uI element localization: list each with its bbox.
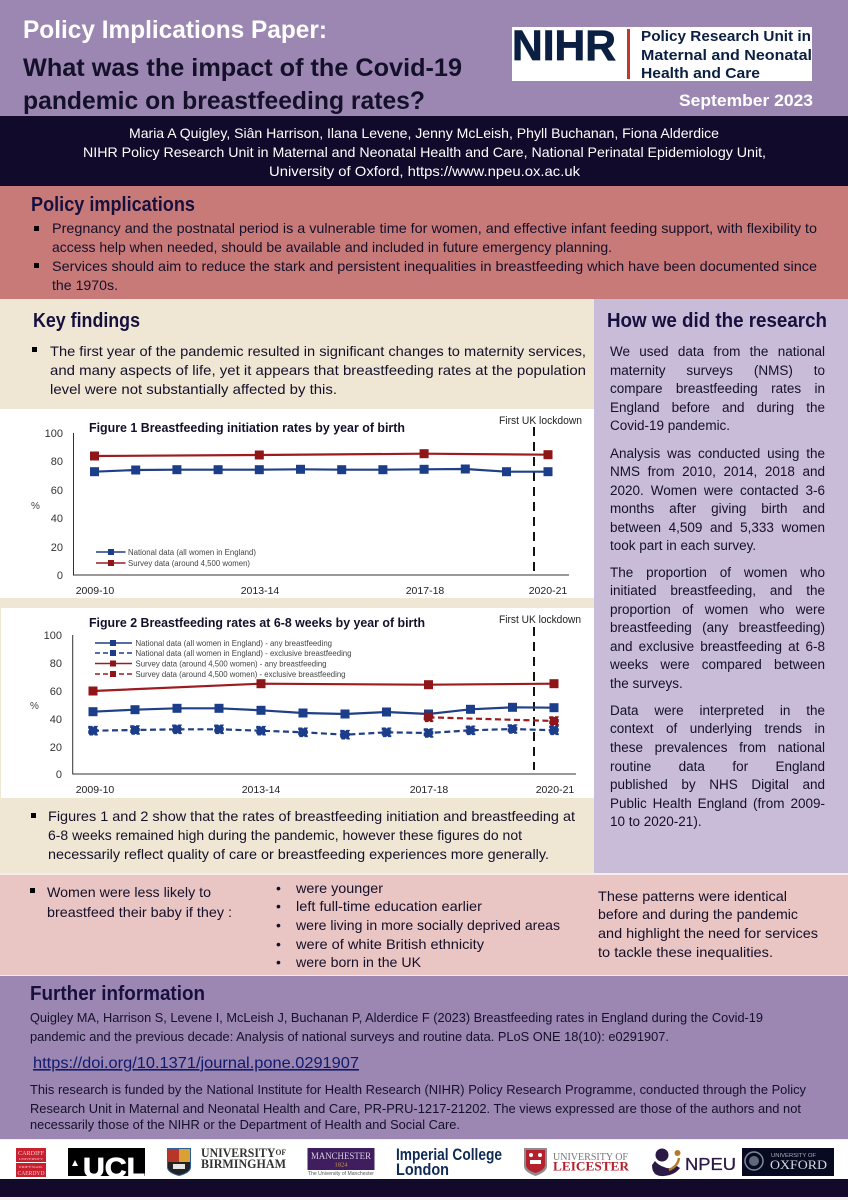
heading: Key findings (33, 310, 140, 332)
logo: Leicester (524, 1148, 630, 1176)
logo: Oxford (742, 1148, 834, 1176)
factor list: were younger (295, 880, 383, 896)
method paragraphs: the surveys. (610, 676, 683, 691)
factor list: left full-time education earlier (296, 898, 482, 914)
conclusion: before and during the pandemic (598, 906, 798, 922)
chart: figure 1: 2009-10 (76, 585, 114, 597)
factor list: • (276, 898, 281, 914)
chart: figure 1: 2013-14 (241, 585, 279, 597)
method paragraphs: took part in each survey. (610, 538, 756, 553)
citation (30, 1010, 763, 1044)
NIHR logo (512, 22, 812, 82)
chart: figure 2: % (30, 701, 39, 712)
authors band: NIHR Policy Research Unit in Maternal and Neonatal Health and Care, National Perinatal Epidemiology Unit, (83, 144, 766, 160)
citation: pandemic and the previous decade: Analysis of national surveys and routine data. PLoS ONE 18(10): e0291907. (30, 1029, 669, 1044)
method paragraphs: these prevalences from national (610, 740, 825, 755)
chart: figure 2 (1, 608, 594, 798)
logo: Leicester: LEICESTER (553, 1158, 630, 1174)
method paragraphs (610, 344, 825, 829)
findings text (32, 343, 586, 397)
panel: how we did the research (594, 299, 848, 873)
NIHR logo: Maternal and Neonatal (641, 47, 812, 64)
method paragraphs: Public Health England (from 2009- (610, 796, 825, 811)
method paragraphs: initiated breastfeeding, and the (610, 583, 825, 598)
figures commentary: necessarily reflect quality of care or breastfeeding experiences more generally. (48, 846, 549, 862)
logo: Cardiff: CARDIFF (18, 1150, 44, 1157)
chart: figure 2: 2017-18 (410, 784, 448, 796)
logo: Birmingham: UNIVERSITY (201, 1146, 280, 1160)
logo: Manchester: The University of Manchester (308, 1171, 374, 1177)
logo: Manchester: MANCHESTER (311, 1151, 371, 1161)
inequalities lead-in: breastfeed their baby if they : (47, 904, 232, 920)
funding statement: Research Unit in Maternal and Neonatal Health and Care, PR-PRU-1217-21202. The views expressed are those of the authors and not (30, 1101, 801, 1116)
policy bullets: access help when needed, should be available and included in future emergency planning. (52, 239, 612, 255)
method paragraphs: England before and during the (610, 400, 825, 415)
logo: Imperial College London: Imperial College (396, 1146, 502, 1164)
footer band (0, 1179, 848, 1197)
method paragraphs: breastfeeding (any breastfeeding) (610, 620, 825, 635)
factor list: were living in more socially deprived areas (295, 917, 560, 933)
figures commentary (31, 808, 575, 862)
method paragraphs: routine data for England (610, 759, 825, 774)
factor list: • (276, 936, 281, 952)
factor list: were born in the UK (295, 954, 422, 970)
funding statement (30, 1082, 806, 1132)
chart: figure 2: 80 (50, 658, 62, 670)
factor list (276, 880, 560, 970)
chart: figure 2: National data (all women in England) - exclusive breastfeeding (136, 649, 352, 658)
logo strip (0, 1140, 848, 1179)
method paragraphs: The proportion of women who (610, 565, 825, 580)
logo: Cardiff: PRIFYSGOL (19, 1165, 43, 1169)
chart: figure 1: 60 (51, 485, 63, 497)
citation: Quigley MA, Harrison S, Levene I, McLeish J, Buchanan P, Alderdice F (2023) Breastfeeding rates in England during the Covid-19 (30, 1010, 763, 1025)
chart: figure 1: % (31, 501, 40, 512)
chart: figure 2: First UK lockdown (499, 614, 581, 626)
method paragraphs: months after giving birth and (610, 501, 825, 516)
chart: figure 1: 0 (57, 570, 63, 582)
method paragraphs: and exclusive breastfeeding at 6-8 (610, 639, 825, 654)
method paragraphs: weeks were compared between (610, 657, 825, 672)
chart: figure 1: Survey data (around 4,500 women) (128, 559, 250, 568)
title (23, 16, 462, 115)
funding statement: necessarily those of the NIHR or the Department of Health and Social Care. (30, 1117, 460, 1132)
funding statement: This research is funded by the National Institute for Health Research (NIHR) Policy Research Programme, conducted through the Policy (30, 1082, 806, 1097)
chart: figure 2: 2013-14 (242, 784, 280, 796)
chart: figure 1: 100 (45, 428, 63, 440)
title: pandemic on breastfeeding rates? (23, 87, 425, 115)
chart: figure 1: 20 (51, 542, 63, 554)
method paragraphs: 2020. Women were contacted 3-6 (610, 483, 825, 498)
date: September 2023 (679, 91, 813, 110)
factor list: • (276, 954, 281, 970)
logo: Manchester (308, 1148, 374, 1177)
chart: figure 1: First UK lockdown (499, 415, 582, 427)
logo: Birmingham: OF (275, 1148, 286, 1157)
logo: Oxford: OXFORD (770, 1157, 827, 1172)
chart: figure 2: 40 (50, 714, 62, 726)
method paragraphs: NMS from 2010, 2014, 2018 and (610, 464, 825, 479)
chart: figure 1: 2020-21 (529, 585, 567, 597)
figures commentary: Figures 1 and 2 show that the rates of breastfeeding initiation and breastfeeding at (48, 808, 575, 824)
policy bullets (34, 220, 817, 293)
logo: Oxford: UNIVERSITY OF (771, 1153, 817, 1159)
logo: Leicester: UNIVERSITY OF (553, 1152, 628, 1163)
method paragraphs: context of underlying trends in (610, 721, 825, 736)
logo: Imperial College London: London (396, 1161, 449, 1179)
heading: Policy implications (31, 194, 195, 216)
link: https://doi.org/10.1371/journal.pone.0291907 (33, 1055, 359, 1072)
method paragraphs: proportion of women who were (610, 602, 825, 617)
method paragraphs: Covid-19 pandemic. (610, 418, 730, 433)
policy bullets: Pregnancy and the postnatal period is a vulnerable time for women, and effective infant feeding support, with flexibility to (52, 220, 817, 236)
factor list: • (276, 880, 281, 896)
heading: Further information (30, 983, 205, 1005)
chart: figure 2: 60 (50, 686, 62, 698)
chart: figure 2: 20 (50, 742, 62, 754)
conclusion: to tackle these inequalities. (598, 944, 773, 960)
authors band (0, 116, 848, 186)
authors band: Maria A Quigley, Siân Harrison, Ilana Levene, Jenny McLeish, Phyll Buchanan, Fiona Alderdice (129, 125, 719, 141)
method paragraphs: Analysis was conducted using the (610, 446, 825, 461)
logo: Imperial College London (396, 1146, 502, 1179)
logo: Birmingham (167, 1146, 286, 1176)
conclusion: and highlight the need for services (598, 925, 818, 941)
method paragraphs: We used data from the national (610, 344, 825, 359)
logo: Cardiff: CAERDYD (18, 1170, 45, 1177)
policy bullets: Services should aim to reduce the stark and persistent inequalities in breastfeeding which have been documented since (52, 258, 817, 274)
logo: Manchester: 1824 (334, 1162, 348, 1168)
chart: figure 2: National data (all women in England) - any breastfeeding (136, 639, 332, 648)
heading: How we did the research (607, 310, 827, 332)
chart: figure 2: 0 (56, 769, 62, 781)
chart: figure 1: Figure 1 Breastfeeding initiation rates by year of birth (89, 420, 405, 435)
logo: UCL (68, 1148, 145, 1183)
logo: Birmingham: BIRMINGHAM (201, 1157, 286, 1171)
findings text: level were not substantially affected by this. (50, 381, 337, 397)
policy bullets: the 1970s. (52, 277, 118, 293)
logo: NPEU (652, 1148, 736, 1176)
logo: Cardiff (16, 1148, 46, 1177)
chart: figure 2: 100 (44, 630, 62, 642)
findings text: and many aspects of life, yet it appears that breastfeeding rates at the population (50, 362, 586, 378)
title: What was the impact of the Covid-19 (23, 54, 462, 82)
NIHR logo: Policy Research Unit in (641, 28, 811, 45)
panel: key findings (0, 299, 594, 873)
chart: figure 1: 80 (51, 456, 63, 468)
factor list: • (276, 917, 281, 933)
chart: figure 2: Survey data (around 4,500 women) - exclusive breastfeeding (136, 670, 346, 679)
method paragraphs: published by NHS Digital and (610, 777, 825, 792)
header panel (0, 0, 848, 116)
figures commentary: 6-8 weeks remained high during the pandemic, however these figures do not (48, 827, 522, 843)
chart: figure 2: 2020-21 (536, 784, 574, 796)
panel: inequalities (0, 875, 848, 975)
NIHR logo: Health and Care (641, 65, 760, 82)
method paragraphs: maternity surveys (NMS) to (610, 363, 825, 378)
conclusion: These patterns were identical (598, 888, 787, 904)
logo: Cardiff: UNIVERSITY (19, 1157, 44, 1161)
chart: figure 2: Figure 2 Breastfeeding rates at 6-8 weeks by year of birth (89, 615, 425, 630)
panel: further information (0, 976, 848, 1139)
chart: figure 1: National data (all women in England) (128, 548, 256, 557)
chart: figure 1: 40 (51, 513, 63, 525)
conclusion (598, 888, 818, 960)
factor list: were of white British ethnicity (295, 936, 484, 952)
chart: figure 1 (0, 409, 594, 598)
method paragraphs: 10 to 2020-21). (610, 814, 702, 829)
inequalities lead-in (30, 884, 232, 920)
chart: figure 2: 2009-10 (76, 784, 114, 796)
findings text: The first year of the pandemic resulted in significant changes to maternity services, (50, 343, 586, 359)
chart: figure 1: 2017-18 (406, 585, 444, 597)
logo: NPEU: NPEU (685, 1154, 736, 1174)
method paragraphs: between 4,509 and 5,333 women (610, 520, 825, 535)
authors band: University of Oxford, https://www.npeu.ox.ac.uk (269, 163, 581, 179)
title: Policy Implications Paper: (23, 16, 327, 44)
NIHR logo: NIHR (512, 22, 616, 70)
method paragraphs: compare breastfeeding rates in (610, 381, 825, 396)
panel: policy implications (0, 186, 848, 299)
inequalities lead-in: Women were less likely to (47, 884, 211, 900)
chart: figure 2: Survey data (around 4,500 women) - any breastfeeding (136, 660, 326, 668)
method paragraphs: Data were interpreted in the (610, 703, 825, 718)
